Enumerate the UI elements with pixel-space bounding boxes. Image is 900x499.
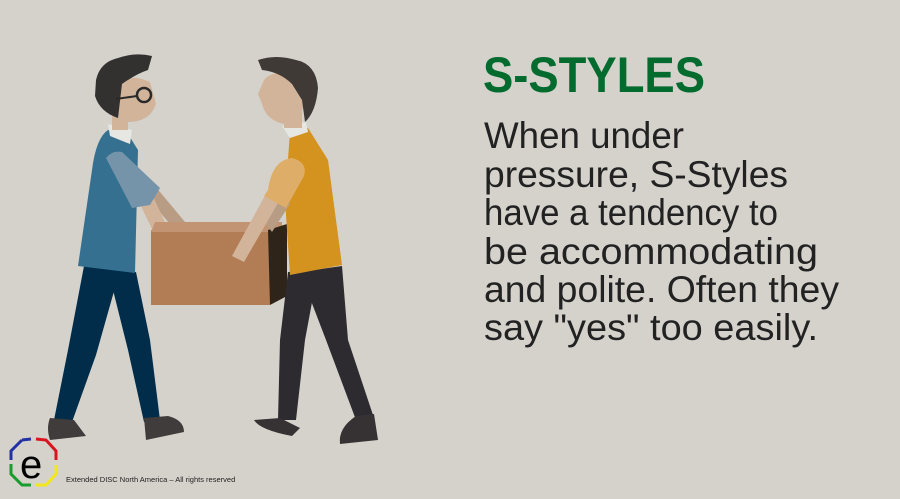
forearms [262,196,290,232]
head [258,73,304,124]
glasses [137,88,151,102]
footer: Extended DISC North America – All rights reserved [66,475,235,484]
feet [48,418,86,440]
left legs [54,266,120,422]
figure: right man (orange shirt) [232,57,378,444]
body text: say "yes" too easily. [484,307,818,348]
hair [95,54,152,118]
figure: left man (blue shirt, glasses) [48,54,190,440]
sleeve [106,152,160,208]
box [151,222,287,305]
collar [282,122,308,138]
hair [258,57,318,122]
shirt [78,130,138,273]
head [112,78,156,122]
body text: be accommodating [484,231,818,272]
logo [11,439,56,487]
body text: have a tendency to [484,192,778,233]
body text: and polite. Often they [484,269,839,310]
shirt [285,128,342,275]
title: S-STYLES [483,47,705,103]
neck [284,112,302,128]
feet [254,418,300,436]
body text [484,115,839,348]
body text: When under [484,115,684,156]
sleeve [264,158,305,208]
logo: e [20,443,42,487]
body text: pressure, S-Styles [484,154,788,195]
neck [112,116,128,130]
forearm to box [148,186,190,236]
legs [278,270,318,420]
collar [108,124,132,144]
